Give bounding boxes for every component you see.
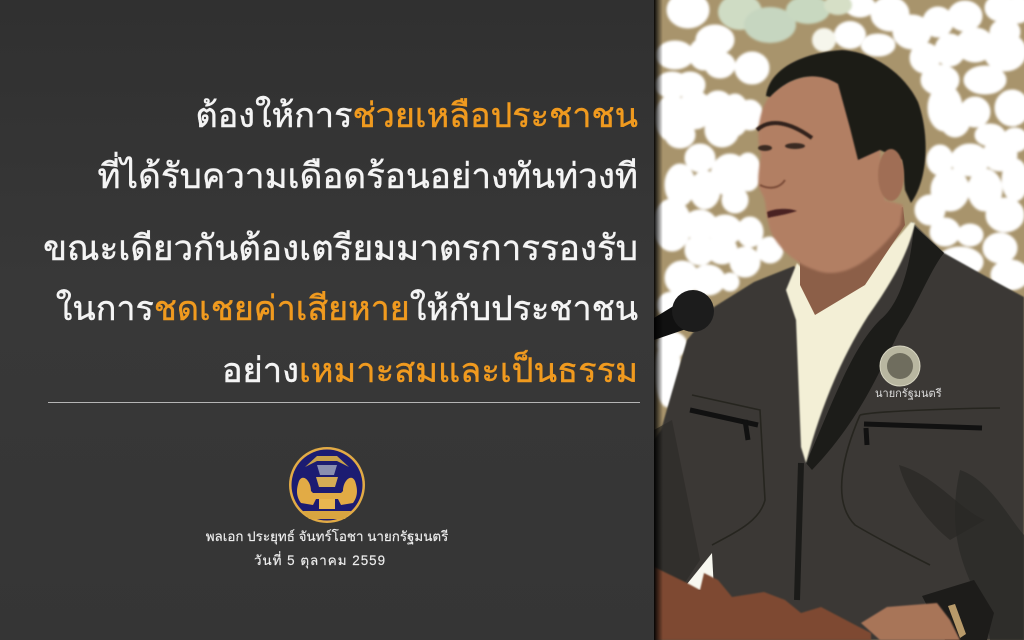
photo background: bokeh lights [654, 0, 1024, 640]
microphone [654, 290, 714, 340]
watch [948, 604, 966, 638]
cuff [922, 580, 994, 640]
ear [878, 149, 904, 201]
quote line 3: ขณะเดียวกันต้องเตรียมมาตรการรองรับ [43, 229, 638, 268]
facial features [757, 123, 812, 218]
shadow edge [654, 0, 663, 640]
panel: dark quote background [0, 0, 654, 640]
jacket [654, 222, 1024, 640]
quote line 2: ที่ได้รับความเดือดร้อนอย่างทันท่วงที [97, 157, 638, 196]
jacket emblem [875, 346, 942, 400]
hand [861, 603, 960, 640]
photo: speaker at microphone [654, 0, 1024, 640]
podium [654, 567, 871, 640]
quote line 1: ต้องให้การช่วยเหลือประชาชน [196, 97, 638, 135]
hair [766, 50, 926, 203]
quote line 4: ในการชดเชยค่าเสียหายให้กับประชาชน [56, 290, 638, 328]
neck [780, 207, 905, 315]
jacket emblem: นายกรัฐมนตรี [875, 387, 942, 400]
shirt [786, 222, 915, 463]
signature: name and title: พลเอก ประยุทธ์ จันทร์โอชา นายกรัฐมนตรี [206, 529, 448, 544]
emblem: government seal [289, 447, 365, 523]
quote line 5: อย่างเหมาะสมและเป็นธรรม [222, 352, 638, 390]
white gap beside arm [687, 553, 714, 590]
signature: date: วันที่ 5 ตุลาคม 2559 [254, 553, 386, 568]
face [758, 72, 903, 273]
divider line [48, 402, 640, 403]
jacket dark shading [654, 226, 1024, 640]
